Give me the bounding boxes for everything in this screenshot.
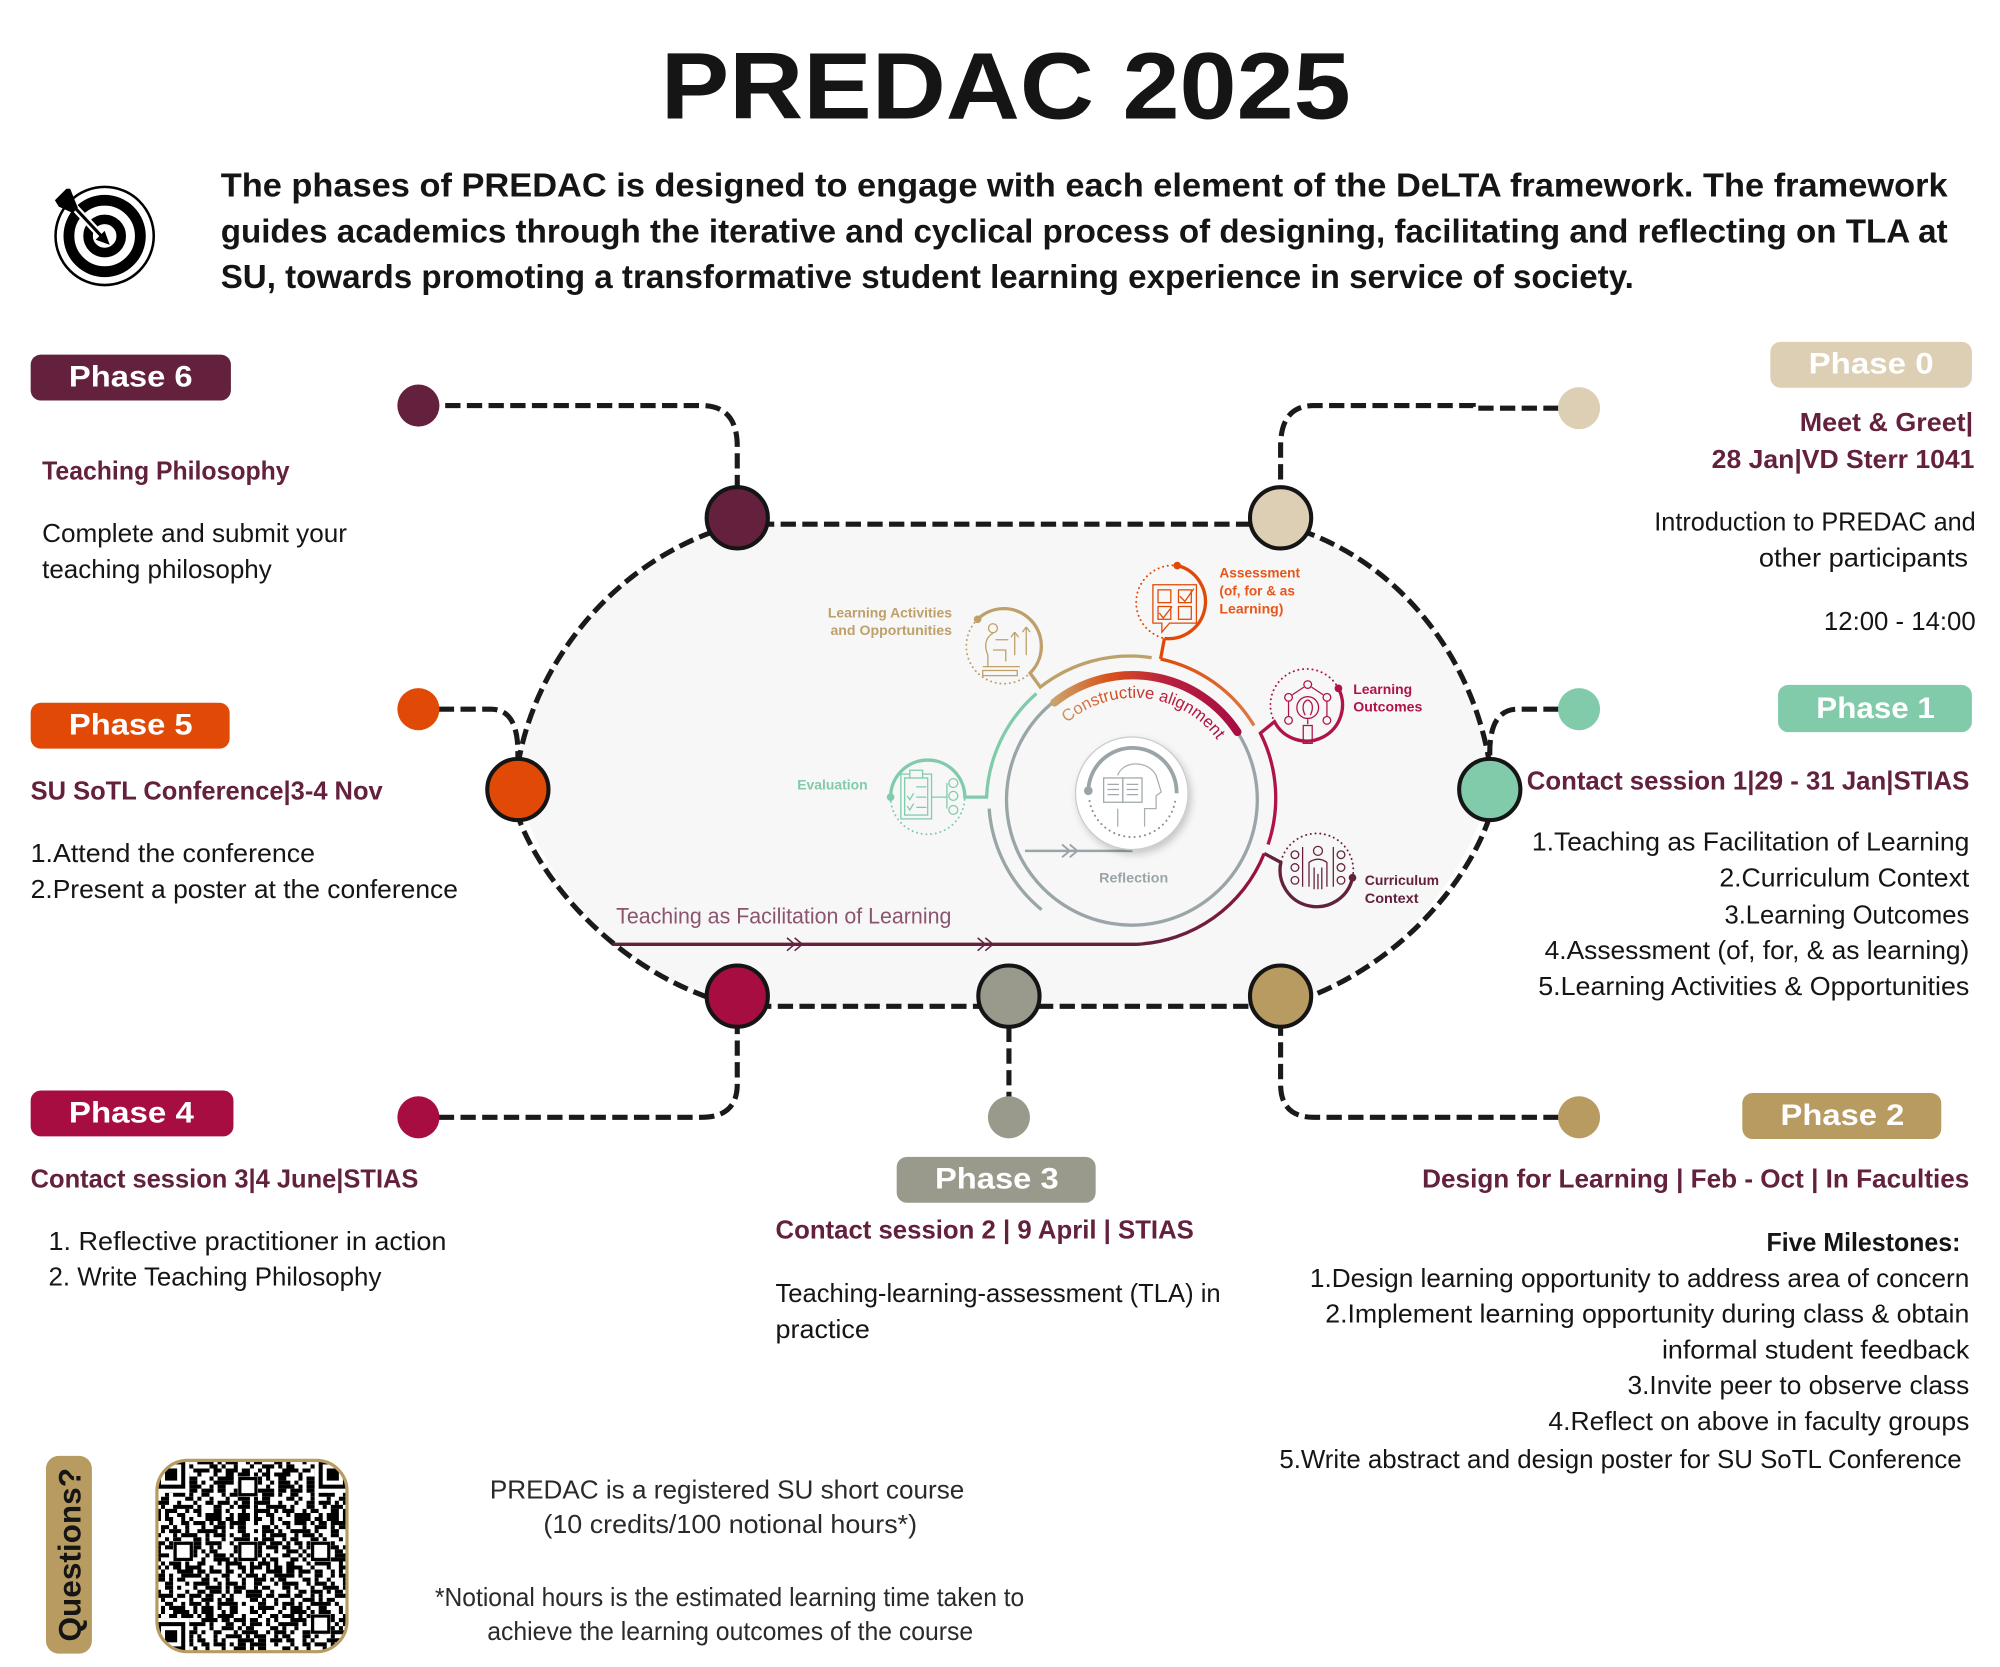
QR code [157,1460,347,1652]
head and book icon [1075,737,1188,850]
course note: (10 credits/100 notional hours*) [543,1509,917,1539]
intro paragraph: SU, towards promoting a transformative student learning experience in service of society. [221,258,1634,296]
text: phase 4: 2. Write Teaching Philosophy [49,1262,382,1292]
reflection label: Reflection [1099,870,1168,886]
panel: phase 1 [1527,685,1972,1001]
pill: phase 6 [31,355,231,400]
panel: phase 2 [1279,1093,1970,1474]
item: learning activities and opportunities [828,605,1152,687]
connector end dots [397,385,1600,1138]
connector lines [439,406,1559,1117]
text: phase 3 [776,1278,1221,1344]
pill: phase 2: Phase 2 [1781,1099,1904,1132]
text: phase 3: practice [776,1314,870,1344]
heading: phase 2: Design for Learning | Feb - Oct | In Faculties [1422,1163,1969,1193]
text: phase 1: 1.Teaching as Facilitation of Learning [1532,827,1969,857]
pill: phase 5: Phase 5 [69,709,193,742]
phase nodes [487,487,1520,1027]
heading: phase 0 [1712,407,1974,474]
course note: achieve the learning outcomes of the course [487,1616,973,1646]
text: phase 3: Teaching-learning-assessment (TLA) in [776,1278,1221,1308]
panel: phase 6 [31,355,347,584]
text: phase 1 [1532,827,1970,1001]
text: phase 1: 2.Curriculum Context [1719,862,1970,892]
text: phase 5: 1.Attend the conference [31,838,315,868]
heading: phase 5: SU SoTL Conference|3-4 Nov [31,776,383,806]
intro paragraph: The phases of PREDAC is designed to engage with each element of the DeLTA framework. The framework [221,166,1948,204]
heading: phase 1: Contact session 1|29 - 31 Jan|STIAS [1527,765,1969,795]
chevrons on facilitation line [787,938,993,951]
intro paragraph [221,166,1948,296]
central track oval [518,524,1490,1006]
item: curriculum context: Curriculum [1365,873,1439,888]
text: phase 1: 5.Learning Activities & Opportunities [1538,971,1969,1001]
text: phase 0: Introduction to PREDAC and [1654,507,1976,537]
course note: *Notional hours is the estimated learning time taken to [435,1582,1024,1612]
teaching as facilitation label: Teaching as Facilitation of Learning [616,903,951,928]
item: assessment: (of, for & as [1219,584,1295,599]
pill: phase 0: Phase 0 [1809,348,1934,381]
text: phase 5: 2.Present a poster at the conference [31,874,458,904]
item: curriculum context: Context [1365,891,1419,906]
item: curriculum context [612,833,1439,944]
heading: phase 3: Contact session 2 | 9 April | STIAS [776,1214,1194,1244]
text: five milestones: 3.Invite peer to observe class [1628,1370,1969,1400]
constructive alignment ring: Constructive alignment [1062,686,1224,740]
heading: phase 6: Teaching Philosophy [42,456,290,486]
title: PREDAC 2025 [661,35,1351,140]
text: phase 6: teaching philosophy [42,554,273,584]
text: phase 4 [49,1226,446,1292]
text: phase 6 [42,518,347,584]
pill: phase 1: Phase 1 [1816,692,1935,725]
panel: phase 5 [31,703,458,904]
questions tab: Questions? [51,1468,87,1641]
pill: phase 4: Phase 4 [69,1096,195,1129]
heading: phase 0: Meet & Greet| [1800,407,1973,437]
item: assessment [1136,562,1301,725]
item: assessment: Learning) [1219,602,1283,617]
text: five milestones: 2.Implement learning opportunity during class & obtain [1325,1299,1969,1329]
item: evaluation [797,694,1036,834]
text: five milestones: 1.Design learning opportunity to address area of concern [1310,1263,1969,1293]
pill: phase 3: Phase 3 [935,1163,1059,1196]
pill: phase 4 [31,1091,233,1136]
text: five milestones: 4.Reflect on above in faculty groups [1548,1406,1969,1436]
pill: phase 2 [1742,1093,1941,1139]
text: phase 0 [1654,507,1976,636]
item: learning activities and opportunities: and Opportunities [830,623,952,638]
text: phase 1: 4.Assessment (of, for, & as learning) [1545,935,1969,965]
text: phase 0: 12:00 - 14:00 [1824,606,1976,636]
pill: phase 3 [897,1157,1096,1203]
item: evaluation: Evaluation [797,777,868,792]
reflection arrow [1025,844,1132,857]
item: assessment: Assessment [1219,566,1301,581]
reflection arc [989,809,1042,910]
text: five milestones: informal student feedback [1662,1334,1970,1364]
panel: phase 0 [1654,342,1976,636]
text: phase 1: 3.Learning Outcomes [1724,899,1969,929]
heading: phase 0: 28 Jan|VD Sterr 1041 [1712,444,1974,474]
item: learning activities and opportunities: Learning Activities [828,605,952,620]
icon: target with arrow [55,187,154,285]
questions tab [46,1456,92,1654]
text: phase 0: other participants [1759,542,1968,572]
pill: phase 6: Phase 6 [69,360,193,393]
intro paragraph: guides academics through the iterative and cyclical process of designing, facilitating and reflecting on TLA at [221,212,1948,250]
pill: phase 1 [1778,685,1972,732]
pill: phase 0 [1770,342,1972,388]
text: five milestones [1279,1227,1970,1474]
course note [435,1475,1024,1646]
course note: PREDAC is a registered SU short course [490,1475,964,1505]
text: phase 5 [31,838,458,904]
item: learning outcomes: Learning [1353,682,1412,697]
pill: phase 5 [31,703,230,749]
item: learning outcomes: Outcomes [1353,700,1422,715]
panel: phase 3 [776,1157,1221,1344]
item: learning outcomes [1260,669,1422,844]
DeLTA framework diagram [612,562,1439,952]
panel: phase 4 [31,1091,446,1292]
heading: phase 4: Contact session 3|4 June|STIAS [31,1163,418,1193]
text: five milestones: 5.Write abstract and design poster for SU SoTL Conference [1279,1444,1962,1474]
text: phase 6: Complete and submit your [42,518,347,548]
constructive alignment ring [1004,671,1259,927]
text: phase 4: 1. Reflective practitioner in action [49,1226,446,1256]
text: five milestones: Five Milestones: [1767,1227,1960,1257]
